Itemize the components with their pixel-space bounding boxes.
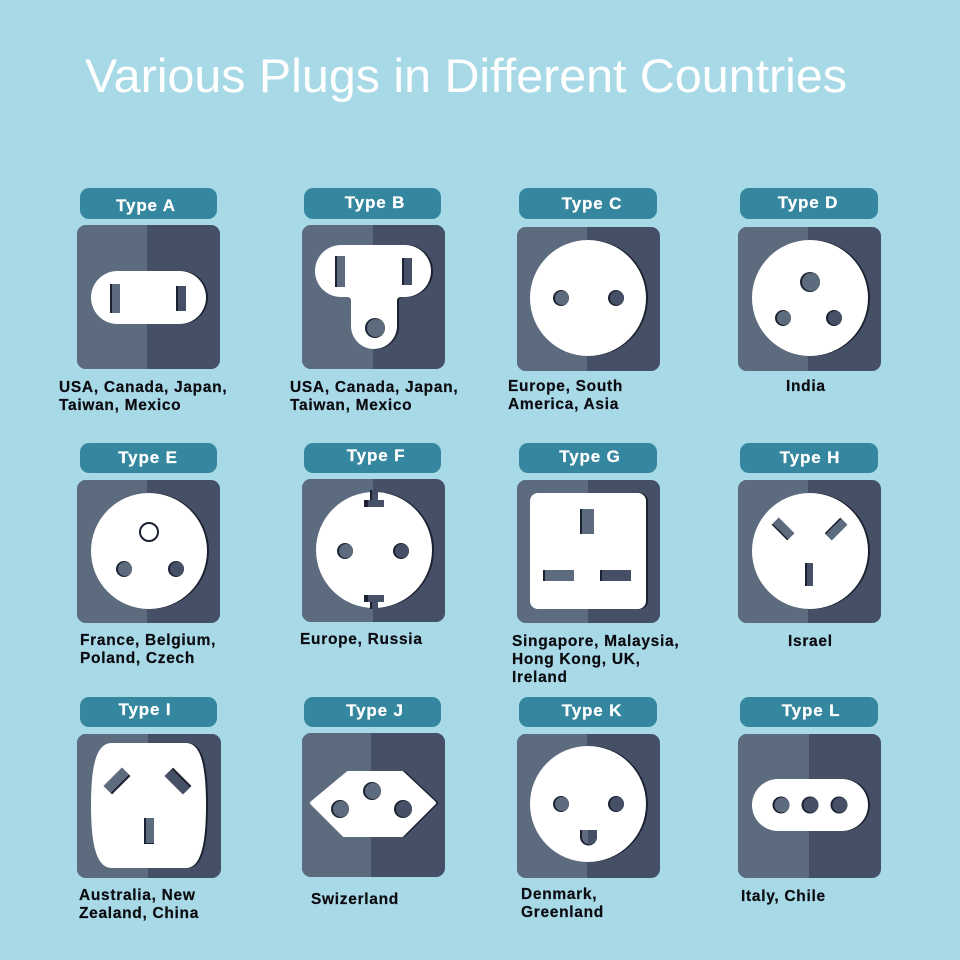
caption: Type K: Denmark, xyxy=(521,886,597,903)
caption: Type H: Israel xyxy=(788,633,833,650)
icon: Type J socket xyxy=(302,733,445,877)
icon: Type L socket xyxy=(738,734,881,878)
icon: Type E socket xyxy=(77,480,220,623)
badge: Type L xyxy=(740,697,878,727)
caption: Type C: Europe, South xyxy=(508,378,623,395)
badge: Type F: Type F xyxy=(347,446,405,465)
badge: Type E: Type E xyxy=(118,448,178,467)
badge: Type J xyxy=(304,697,441,727)
caption: Type G: Ireland xyxy=(512,669,568,686)
badge: Type C: Type C xyxy=(562,194,622,213)
badge: Type K xyxy=(519,697,657,727)
caption: Type B: USA, Canada, Japan, xyxy=(290,379,458,396)
badge: Type H: Type H xyxy=(780,448,840,467)
panel: Type G xyxy=(512,443,679,686)
caption: Type E: France, Belgium, xyxy=(80,632,216,649)
badge: Type G: Type G xyxy=(559,447,621,466)
caption: Type D: India xyxy=(786,378,826,395)
panel: Type I xyxy=(77,697,221,922)
badge: Type J: Type J xyxy=(346,701,404,720)
badge: Type D: Type D xyxy=(778,193,838,212)
caption: Type I: Zealand, China xyxy=(79,905,199,922)
badge: Type H xyxy=(740,443,878,473)
caption: Type B: Taiwan, Mexico xyxy=(290,397,412,414)
caption: Type A: USA, Canada, Japan, xyxy=(59,379,227,396)
caption: Type I: Australia, New xyxy=(79,887,196,904)
badge: Type I: Type I xyxy=(119,700,171,719)
badge: Type L: Type L xyxy=(782,701,840,720)
badge: Type B: Type B xyxy=(345,193,405,212)
panel: Type E xyxy=(77,443,220,667)
icon: Type K socket xyxy=(517,734,660,878)
caption: Type F: Europe, Russia xyxy=(300,631,423,648)
caption: Type K: Greenland xyxy=(521,904,604,921)
icon: Type C socket xyxy=(517,227,660,371)
caption: Type C: America, Asia xyxy=(508,396,619,413)
badge: Type B xyxy=(304,188,441,219)
panel: Type F xyxy=(300,443,445,648)
caption: Type J: Swizerland xyxy=(311,891,399,908)
icon: Type A socket xyxy=(77,225,220,369)
panel: Type D xyxy=(738,188,881,395)
icon: Type B socket xyxy=(302,225,445,369)
icon: Type I socket xyxy=(77,734,221,878)
caption: Type L: Italy, Chile xyxy=(741,888,826,905)
panel: Type L xyxy=(738,697,881,905)
panel: Type K xyxy=(517,697,660,921)
caption: Type G: Hong Kong, UK, xyxy=(512,651,641,668)
badge: Type C xyxy=(519,188,657,219)
icon: Type H socket xyxy=(738,480,881,623)
panel: Type B xyxy=(290,188,458,414)
title: Various Plugs in Different Countries xyxy=(85,49,847,102)
badge: Type A xyxy=(80,188,217,219)
badge: Type K: Type K xyxy=(562,701,622,720)
panel: Type J xyxy=(302,697,445,908)
panel: Type H xyxy=(738,443,881,650)
panel: Type C xyxy=(508,188,660,413)
caption: Type G: Singapore, Malaysia, xyxy=(512,633,679,650)
badge: Type D xyxy=(740,188,878,219)
caption: Type E: Poland, Czech xyxy=(80,650,195,667)
badge: Type G xyxy=(519,443,657,473)
badge: Type A: Type A xyxy=(116,196,176,215)
caption: Type A: Taiwan, Mexico xyxy=(59,397,181,414)
badge: Type E xyxy=(80,443,217,473)
icon: Type G socket xyxy=(517,480,660,623)
icon: Type D socket xyxy=(738,227,881,371)
icon: Type F socket xyxy=(302,479,445,622)
panel: Type A xyxy=(59,188,227,414)
badge: Type I xyxy=(80,697,217,727)
badge: Type F xyxy=(304,443,441,473)
